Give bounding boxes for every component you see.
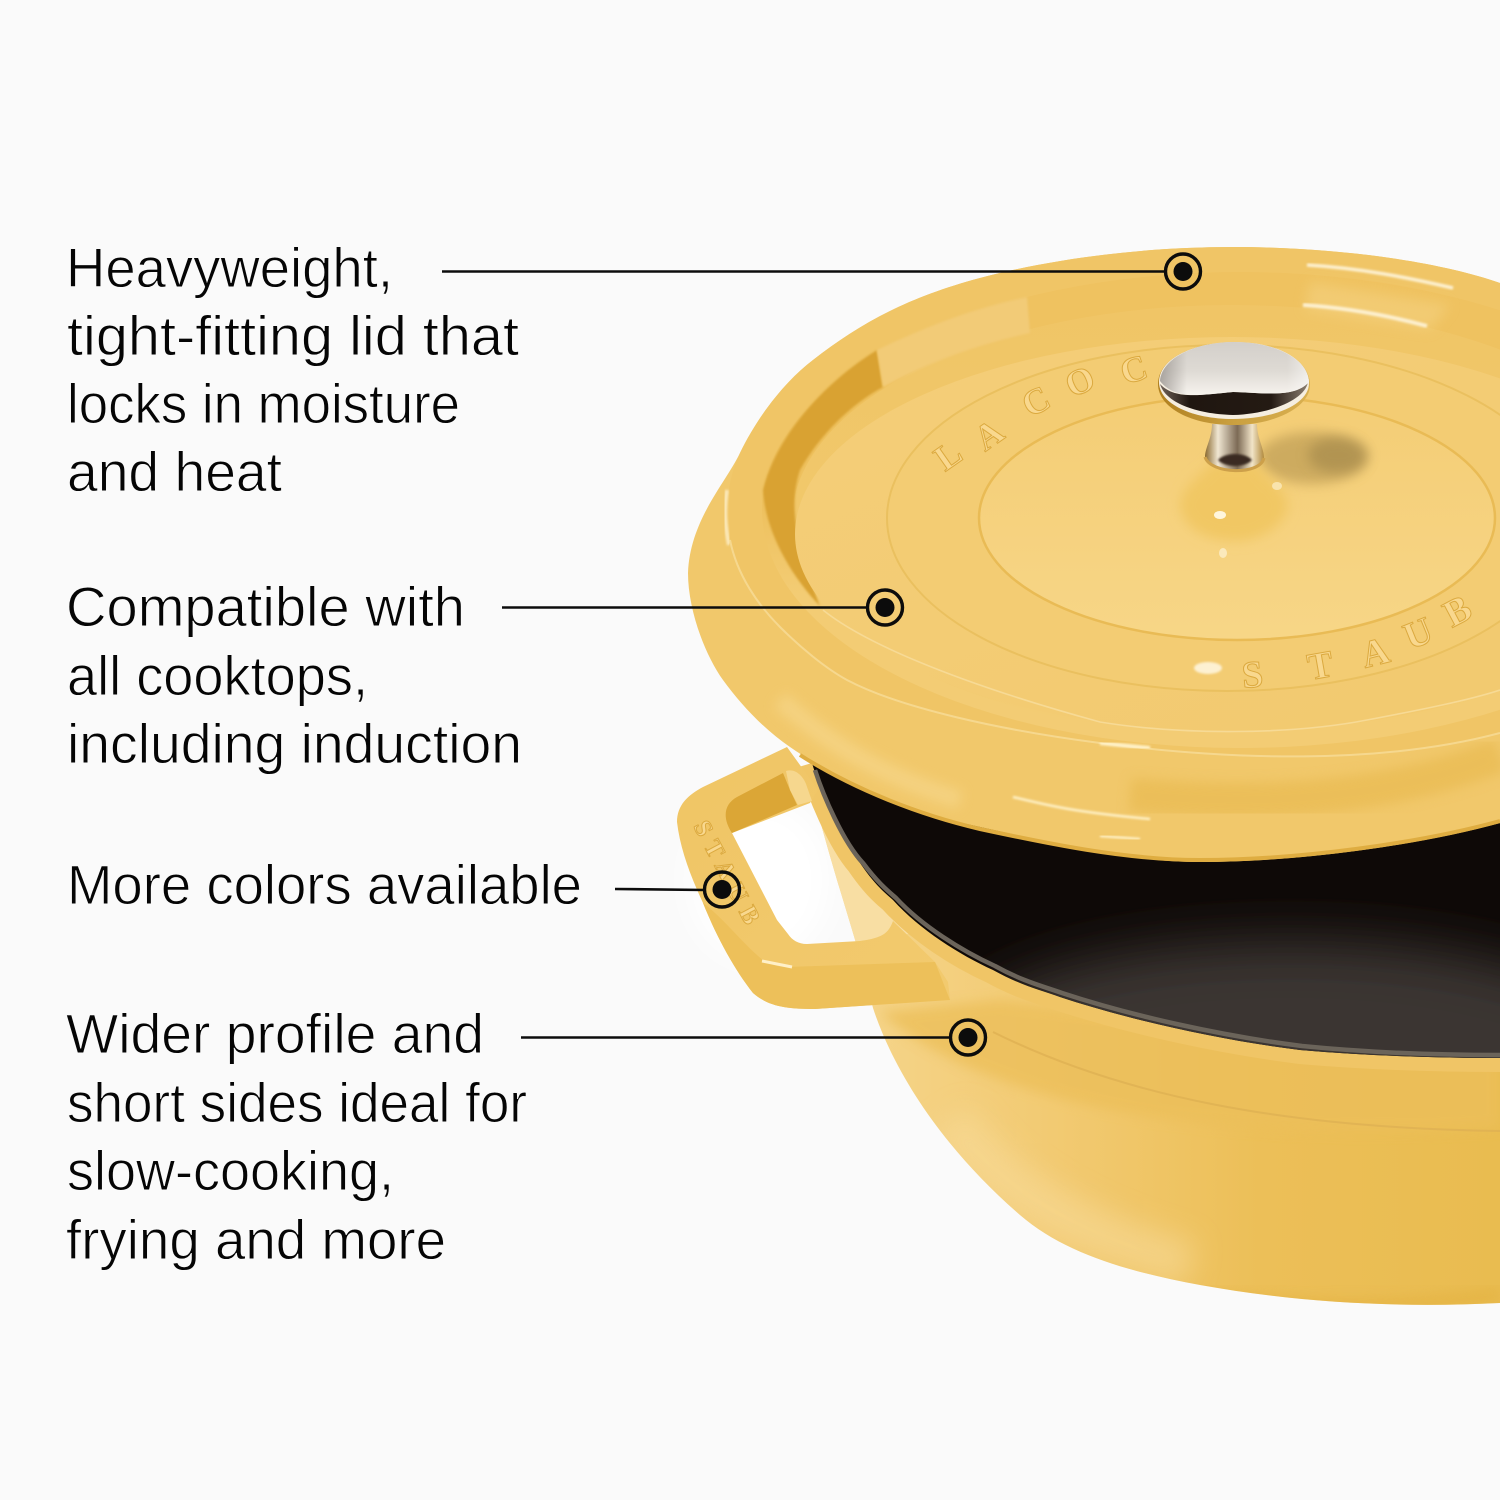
embossed brand lettering: STAUB: STAUB [1240,587,1479,697]
lid upper rim [727,247,1500,756]
callout 4 text: short sides ideal for [67,1071,527,1134]
callout 1 text: locks in moisture [67,372,460,435]
knob stem [1205,424,1264,471]
cookware: yellow cast iron pot with lid [677,247,1500,1306]
callout 4 leader line and marker [521,1020,986,1055]
lid inner band [792,305,1500,735]
side handle [677,747,950,1009]
callout 1 text: Heavyweight, [66,236,393,299]
callout 3 text: More colors available [67,853,582,916]
callout 3: colors [67,853,740,916]
inner plateau [979,396,1495,640]
callout 1 leader line and marker [442,254,1200,289]
pot rim [812,763,1500,1058]
lid bottom edge shading [780,700,1500,860]
pot interior [812,765,1500,1058]
floor lower edge line [823,610,1500,732]
lid outer body [688,247,1500,862]
embossed handle lettering: STAUB [688,816,769,936]
callout 1 text: and heat [67,440,282,503]
embossed brand lettering: LA COC: LA COC [927,347,1152,479]
dark well reflection [763,297,1030,606]
callout 2 text [66,575,522,775]
callout 2 leader line and marker [502,590,902,625]
callout 4 text [66,1002,527,1271]
glossy highlight by brand lettering [1194,662,1222,674]
knob cap [1158,342,1310,425]
knob shadow [1258,432,1368,484]
lid rim glare [725,265,1453,748]
product and callouts illustration [66,247,1500,1305]
callout 2: cooktops [66,575,902,775]
upper rim lower step line [730,540,1500,756]
callout 4 text: frying and more [66,1208,446,1271]
callout 4 text: Wider profile and [66,1002,484,1065]
callout 4: wider profile [66,1002,986,1271]
callout 2 text: including induction [67,712,522,775]
lid well wall [762,272,1500,748]
pot body [822,826,1500,1305]
callout 2 text: Compatible with [66,575,465,638]
callout 1 text [66,236,519,503]
infographic canvas [66,247,1500,1305]
callout 2 text: all cooktops, [67,644,368,707]
callout 3 leader line and marker [615,872,740,907]
callout 1: heavyweight lid [66,236,1200,503]
lid floor [795,337,1500,731]
white glow behind handle [690,800,830,960]
callout 4 text: slow-cooking, [67,1139,394,1202]
raised ring [887,345,1500,691]
knob base [1180,462,1288,558]
callout 1 text: tight-fitting lid that [67,304,519,367]
